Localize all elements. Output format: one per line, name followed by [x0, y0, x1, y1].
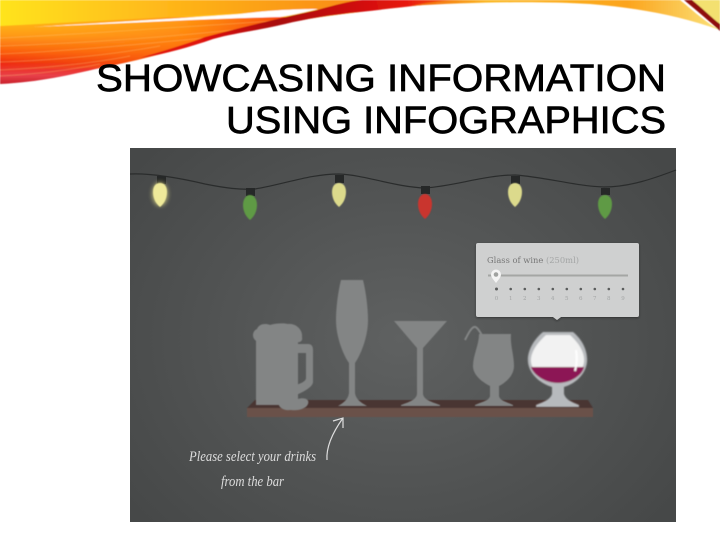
title	[96, 58, 666, 142]
slider knob	[491, 270, 501, 283]
slider tick numbers: 8	[607, 296, 611, 302]
handwritten prompt: Please select your drinks	[188, 449, 316, 465]
slider tick numbers	[495, 296, 625, 302]
icon: champagne flute	[336, 280, 368, 406]
slider tick numbers: 0	[495, 296, 499, 302]
slider tick numbers: 3	[537, 296, 541, 302]
flame ribbon header	[0, 0, 720, 84]
icon: hurricane glass with straw	[465, 327, 514, 406]
shelf	[247, 400, 593, 417]
panel: drinks selector illustration	[130, 148, 676, 522]
callout heading: Glass of wine (250ml)	[487, 255, 579, 266]
slider tick numbers: 2	[523, 296, 527, 302]
icon: beer mug	[253, 323, 313, 410]
title: SHOWCASING INFORMATION	[96, 58, 666, 100]
callout: glass of wine slider	[476, 243, 639, 320]
icon: wine glass	[528, 332, 587, 407]
handwritten prompt: from the bar	[221, 474, 284, 490]
slider tick numbers: 6	[579, 296, 583, 302]
icon: martini glass	[394, 321, 447, 406]
handwritten prompt	[188, 449, 316, 490]
slider tick numbers: 9	[621, 296, 625, 302]
string of lights	[130, 170, 676, 220]
arrow	[327, 418, 343, 460]
slider tick numbers: 7	[593, 296, 597, 302]
slider tick numbers: 5	[565, 296, 569, 302]
slider tick numbers: 1	[509, 296, 512, 302]
title: USING INFOGRAPHICS	[226, 100, 666, 142]
slider tick dots	[495, 288, 624, 290]
slider track	[488, 274, 628, 276]
slider tick numbers: 4	[551, 296, 555, 302]
